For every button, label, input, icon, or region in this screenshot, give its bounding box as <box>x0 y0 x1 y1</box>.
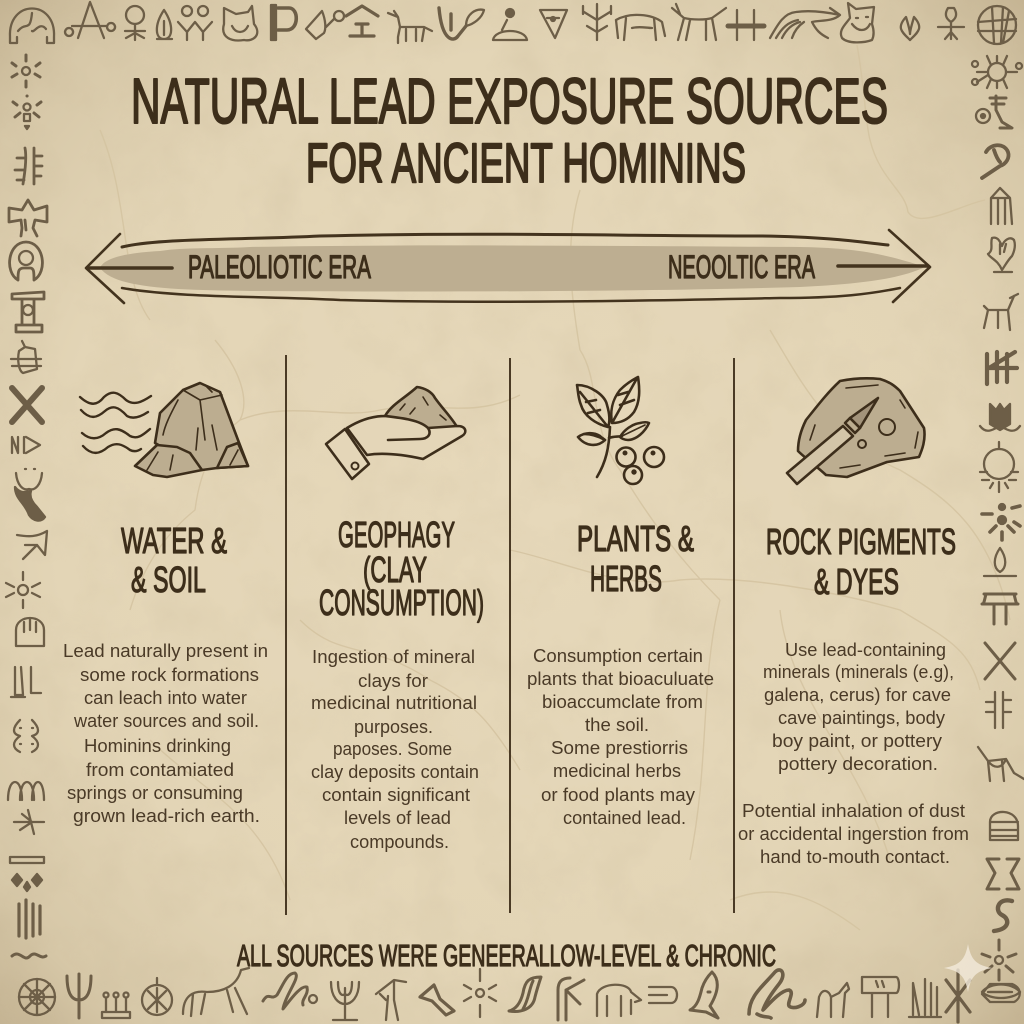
panel: water and soil <box>63 383 268 826</box>
text: water and soil description <box>63 641 268 826</box>
column dividers <box>286 355 734 915</box>
text: plants and herbs description: or food plants may <box>541 785 695 805</box>
text: water and soil description: Hominins drinking <box>84 736 231 756</box>
text: plants and herbs description <box>527 646 714 828</box>
text: geophagy description: contain significant <box>322 785 470 805</box>
text: water and soil description: Lead naturally present in <box>63 641 268 661</box>
text: geophagy description: clays for <box>358 671 428 691</box>
border: top row of petroglyphs <box>10 2 1016 44</box>
icon: sparkle watermark <box>944 944 992 992</box>
icon: leaves and berries <box>577 377 664 484</box>
text: plants and herbs description: plants that bioaculuate <box>527 669 714 689</box>
heading: water and soil <box>121 520 227 600</box>
timeline arrow: Paleolithic to Neolithic <box>86 230 930 303</box>
era label: Neolithic: NEOOLTIC ERA <box>668 249 815 285</box>
title: FOR ANCIENT HOMININS <box>306 131 746 194</box>
text: rock pigments description: Use lead-containing <box>785 640 946 660</box>
text: water and soil description: from contamiated <box>86 760 234 780</box>
panel: plants and herbs <box>527 377 714 828</box>
heading: geophagy: CONSUMPTION) <box>319 582 484 623</box>
icon: hand holding clay <box>326 387 465 479</box>
text: water and soil description: some rock formations <box>80 665 259 685</box>
text: geophagy description: Ingestion of mineral <box>312 647 475 667</box>
title <box>131 65 888 194</box>
heading: water and soil: WATER & <box>121 520 227 561</box>
text: geophagy description: paposes. Some <box>333 739 452 759</box>
heading: geophagy: GEOPHAGY <box>338 514 455 555</box>
heading: water and soil: & SOIL <box>131 559 206 600</box>
era label: Paleolithic: PALEOLIOTIC ERA <box>188 249 371 285</box>
text: water and soil description: water sources and soil. <box>73 711 259 731</box>
text: plants and herbs description: the soil. <box>585 715 649 735</box>
text: rock pigments description: galena, cerus) for cave <box>764 685 951 705</box>
text: plants and herbs description: contained lead. <box>563 808 686 828</box>
heading: rock pigments and dyes <box>766 521 956 602</box>
text: rock pigments description: pottery decoration. <box>778 754 938 774</box>
text: geophagy description: compounds. <box>350 832 449 852</box>
text: rock pigments description: hand to-mouth contact. <box>760 847 950 867</box>
heading: geophagy <box>319 514 484 623</box>
text: plants and herbs description: Consumption certain <box>533 646 703 666</box>
text: rock pigments description: cave paintings, body <box>778 708 945 728</box>
panel: rock pigments and dyes <box>738 378 969 867</box>
text: rock pigments description: or accidental ingerstion from <box>738 824 969 844</box>
text: rock pigments description <box>738 640 969 867</box>
heading: geophagy: (CLAY <box>363 549 427 590</box>
text: plants and herbs description: Some prestiorris <box>551 738 688 758</box>
heading: rock pigments and dyes: & DYES <box>814 561 899 602</box>
text: water and soil description: springs or consuming <box>67 783 243 803</box>
text: water and soil description: can leach into water <box>84 688 247 708</box>
text: geophagy description <box>311 647 479 852</box>
text: plants and herbs description: bioaccumclate from <box>542 692 703 712</box>
text: geophagy description: clay deposits contain <box>311 762 479 782</box>
border: right column of petroglyphs <box>972 56 1024 998</box>
panel: geophagy <box>311 387 484 852</box>
border: bottom row of petroglyphs <box>19 968 1020 1022</box>
text: rock pigments description: boy paint, or pottery <box>772 731 942 751</box>
text: geophagy description: levels of lead <box>344 808 451 828</box>
text: geophagy description: medicinal nutritional <box>311 693 477 713</box>
text: rock pigments description: Potential inhalation of dust <box>742 801 965 821</box>
text: water and soil description: grown lead-rich earth. <box>73 806 260 826</box>
text: rock pigments description: minerals (minerals (e.g), <box>763 662 954 682</box>
icon: waves and rock <box>80 383 248 477</box>
icon: rock and paint brush <box>787 378 925 484</box>
text: geophagy description: purposes. <box>354 717 433 737</box>
text: plants and herbs description: medicinal herbs <box>553 761 681 781</box>
heading: plants and herbs <box>577 518 694 599</box>
heading: plants and herbs: HERBS <box>590 558 662 599</box>
heading: plants and herbs: PLANTS & <box>577 518 694 559</box>
border: left column of petroglyphs <box>6 55 47 958</box>
